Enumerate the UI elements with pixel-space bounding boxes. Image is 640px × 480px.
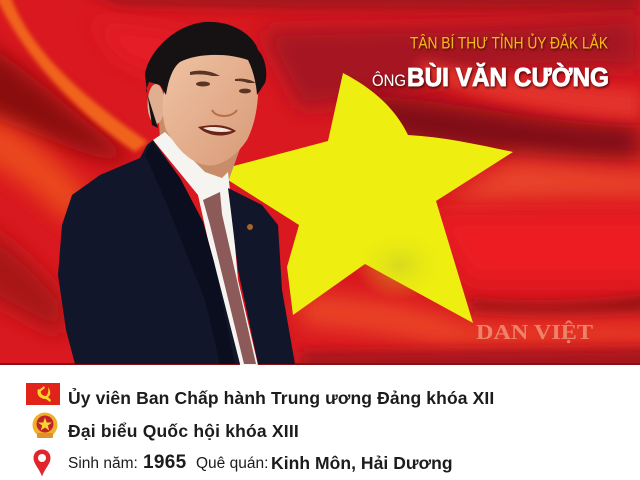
bright upper red	[90, 20, 250, 92]
title: name: BÙI VĂN CƯỜNG	[407, 62, 609, 92]
text: birth and hometown: Kinh Môn, Hải Dương	[271, 453, 453, 473]
suit	[58, 140, 240, 364]
right side bands	[440, 160, 640, 205]
watermark: Dan Viet: DAN VIỆT	[476, 320, 593, 344]
text: birth and hometown: 1965	[143, 452, 186, 473]
title: name: ÔNG	[372, 71, 406, 90]
text: birth and hometown: Sinh năm:	[68, 455, 138, 472]
text: party role: Ủy viên Ban Chấp hành Trung ương Đảng khóa XII	[68, 388, 494, 408]
icon: party flag	[26, 383, 60, 405]
ear	[148, 84, 164, 124]
tie	[203, 192, 256, 364]
dark fold left	[0, 40, 135, 160]
text: birth and hometown: Quê quán:	[196, 455, 268, 472]
neck	[158, 105, 245, 195]
icon: location pin	[34, 450, 50, 476]
top dark	[60, 0, 640, 12]
eyes and brows	[190, 71, 256, 93]
orange lower left band	[0, 115, 90, 225]
lapel shade	[145, 142, 235, 364]
info section	[26, 383, 494, 476]
hero illustration: flag, star and portrait	[0, 0, 640, 365]
face	[163, 47, 259, 166]
headline	[372, 34, 609, 92]
nose	[212, 110, 237, 116]
dark lower left	[0, 225, 65, 335]
text: birth and hometown	[68, 452, 453, 473]
icon: national emblem	[32, 412, 58, 438]
orange swoop	[0, 0, 148, 152]
flag background	[0, 0, 640, 380]
portrait: man in dark suit	[58, 22, 295, 365]
right jacket	[228, 188, 295, 364]
lapel pin	[247, 224, 253, 230]
shirt	[153, 132, 258, 365]
hair	[145, 22, 266, 128]
dark upper right folds	[260, 15, 640, 110]
mouth	[198, 125, 236, 136]
text: national assembly: Đại biểu Quốc hội khóa XIII	[68, 421, 299, 441]
yellow star	[226, 73, 513, 323]
